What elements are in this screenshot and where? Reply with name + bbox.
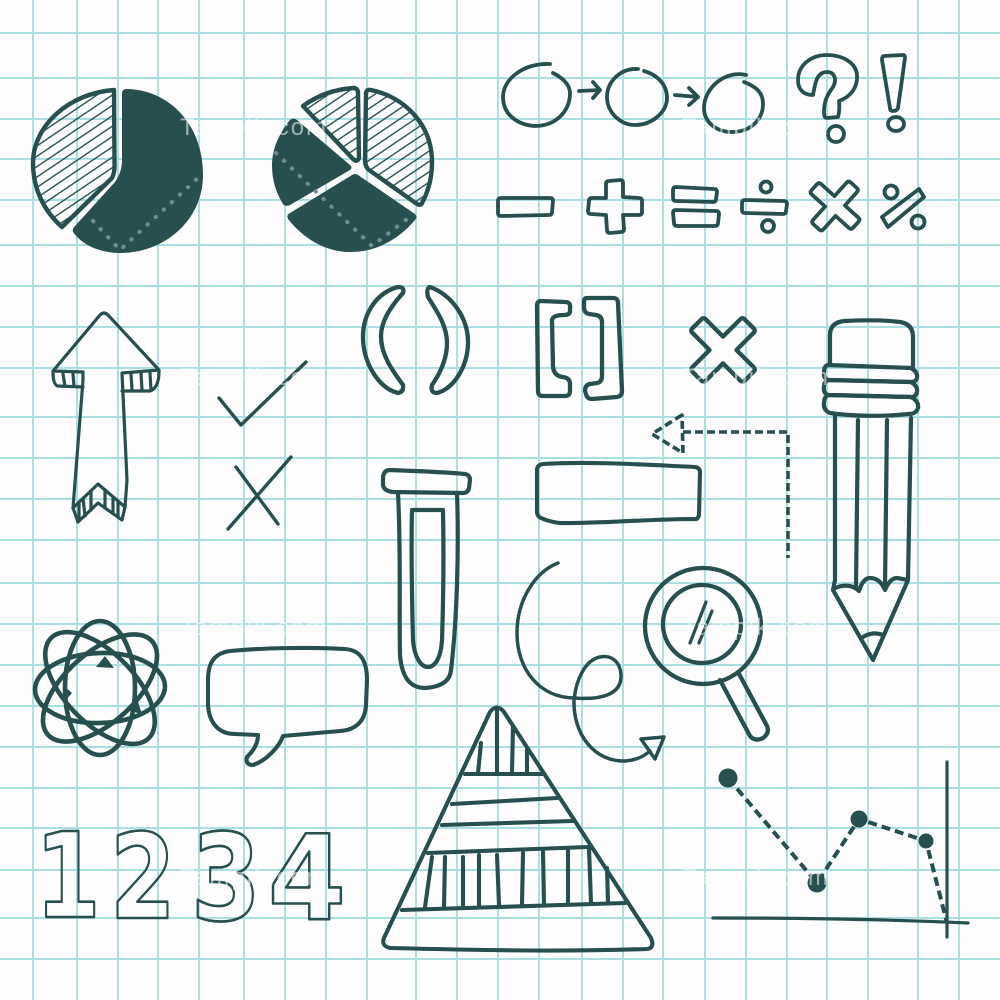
- pyramid: [383, 708, 652, 951]
- atom: [25, 613, 175, 763]
- curly arrow: [517, 563, 664, 761]
- test tube: [383, 470, 470, 688]
- divide: [742, 182, 787, 232]
- numbers 1 2 3 4: 1: [35, 809, 101, 946]
- lower stripes: [425, 848, 608, 907]
- outline: [383, 708, 652, 951]
- minus: [498, 198, 553, 216]
- top stripes: [478, 710, 527, 773]
- pie chart: two slices: [33, 89, 203, 253]
- watermarks: Tampik.com: [682, 614, 830, 641]
- hatched slice top: [303, 88, 359, 161]
- icon: exclamation mark: [882, 55, 905, 131]
- pie chart: four slices: [272, 88, 432, 252]
- axes: [713, 762, 968, 937]
- orbits: [25, 613, 175, 763]
- watermarks: Tampik.com: [682, 864, 830, 891]
- numbers 1 2 3 4: 2: [110, 810, 176, 947]
- speech bubble: [208, 648, 367, 765]
- square brackets: [537, 298, 622, 399]
- sharpened edge: [835, 578, 908, 591]
- solid slice: [73, 89, 203, 253]
- numbers 1 2 3 4: [35, 809, 346, 949]
- eraser: [830, 320, 913, 367]
- cross mark: [228, 457, 291, 529]
- blank rectangle: [537, 463, 700, 523]
- percent: [882, 186, 924, 228]
- orbit junctions: [64, 656, 142, 714]
- line chart: [713, 762, 968, 937]
- check mark: [219, 362, 306, 425]
- outlined x: [671, 298, 775, 402]
- data points: [718, 768, 934, 892]
- hand drawn circles with arrows: [503, 64, 763, 132]
- pencil: [824, 320, 918, 660]
- icon: question mark: [798, 55, 857, 142]
- watermarks: Tampik.com: [682, 114, 830, 141]
- hatched slice right: [365, 90, 432, 205]
- horizontal bands: [402, 774, 625, 910]
- solid slice bottom: [287, 174, 416, 252]
- plus: [588, 180, 642, 233]
- dashed line: [728, 778, 947, 923]
- watermarks: Tampik.com: [180, 614, 328, 641]
- watermarks: [180, 114, 830, 891]
- watermarks: Tampik.com: [682, 364, 830, 391]
- numbers 1 2 3 4: 4: [268, 810, 346, 948]
- big arrow pointing up: [53, 313, 159, 522]
- math operators: [498, 166, 924, 246]
- parentheses: [363, 287, 468, 393]
- hatched slice: [33, 90, 115, 227]
- watermarks: Tampik.com: [180, 364, 328, 391]
- numbers 1 2 3 4: 3: [191, 809, 261, 949]
- dashed arrow: [652, 415, 788, 558]
- pencil body: [833, 415, 911, 660]
- watermarks: Tampik.com: [180, 864, 328, 891]
- equals: [673, 187, 719, 226]
- solid slice left: [272, 118, 352, 206]
- magnifying glass: [645, 568, 768, 740]
- times: [795, 166, 875, 246]
- watermarks: Tampik.com: [180, 114, 328, 141]
- ferrule bands: [824, 365, 917, 382]
